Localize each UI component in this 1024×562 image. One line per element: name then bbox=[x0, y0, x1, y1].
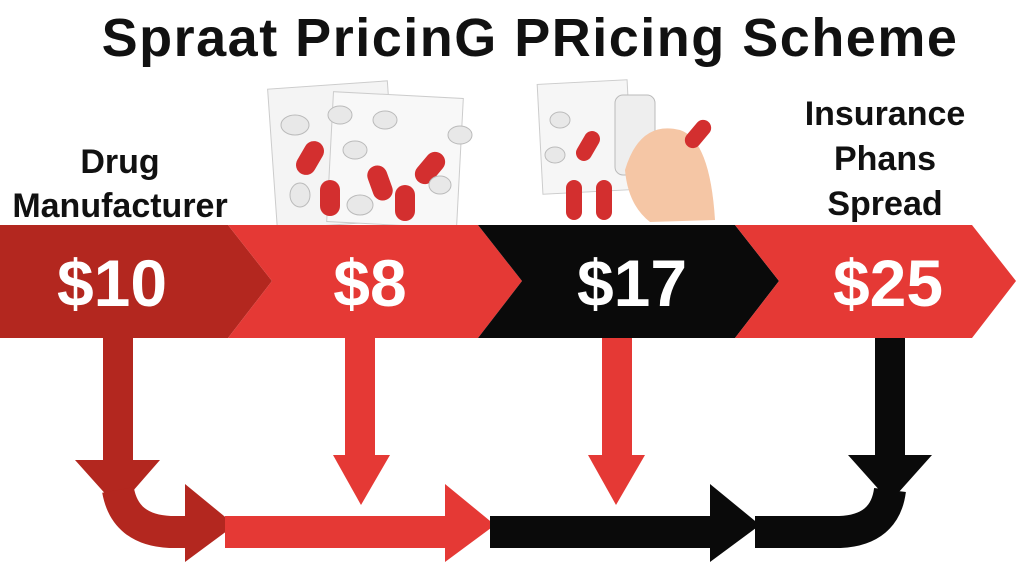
banner segment 2: $8: $8 bbox=[333, 246, 407, 320]
icon: pill pack 1 bbox=[268, 81, 472, 229]
banner segment 2: $8 bbox=[228, 225, 522, 338]
label: insurance plans spread: Spread bbox=[827, 185, 943, 223]
icon: hand with pill bottle bbox=[537, 80, 715, 222]
banner segment 3: $17: $17 bbox=[577, 246, 687, 320]
banner segment 4: $25: $25 bbox=[833, 246, 943, 320]
arrow: down from $25 bbox=[848, 338, 932, 502]
label: drug manufacturer bbox=[12, 143, 228, 225]
label: insurance plans spread: Insurance bbox=[805, 95, 965, 133]
banner segment 1: $10 bbox=[0, 225, 272, 338]
bottom flow arrows bbox=[118, 484, 890, 562]
label: insurance plans spread bbox=[805, 95, 965, 223]
arrow: down from $17 bbox=[588, 338, 645, 505]
banner segment 3: $17 bbox=[478, 225, 779, 338]
title: Spraat PricinG PRicing Scheme bbox=[102, 8, 958, 68]
label: drug manufacturer: Manufacturer bbox=[12, 187, 228, 225]
label: drug manufacturer: Drug bbox=[80, 143, 160, 181]
arrow: down from $10 bbox=[75, 338, 160, 508]
banner segment 1: $10: $10 bbox=[57, 246, 167, 320]
arrow: down from $8 bbox=[333, 338, 390, 505]
label: insurance plans spread: Phans bbox=[834, 140, 936, 178]
banner segment 4: $25 bbox=[735, 225, 1016, 338]
